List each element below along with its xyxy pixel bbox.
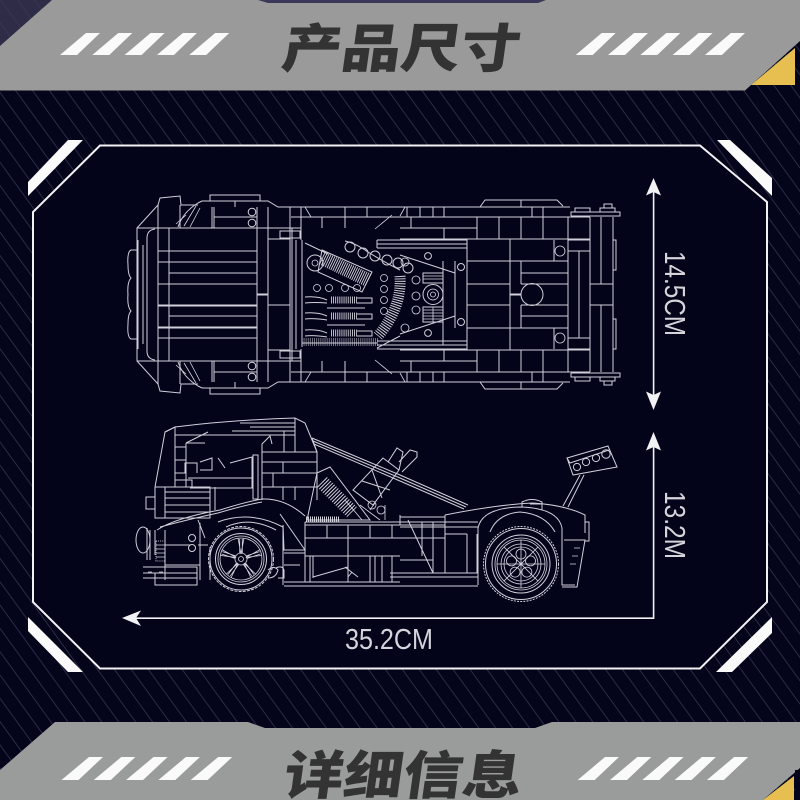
header stripes left	[60, 33, 229, 55]
panel: footer band	[0, 722, 800, 800]
label: 13.2M: 13.2M	[658, 491, 690, 559]
car top view blueprint	[128, 195, 620, 394]
car side view blueprint	[136, 418, 617, 602]
panel: header band	[0, 0, 800, 90]
title: product dimensions: 产品尺寸	[278, 21, 524, 79]
panel: blueprint frame	[33, 146, 767, 668]
footer stripes right	[578, 757, 748, 780]
corner brackets	[28, 140, 772, 672]
top notch accent	[255, 0, 548, 4]
footer stripes left	[62, 757, 232, 780]
label: 14.5CM: 14.5CM	[658, 251, 690, 336]
rear wheel	[484, 526, 558, 602]
label: 35.2CM: 35.2CM	[345, 624, 433, 656]
engine bay detail	[302, 240, 464, 348]
front wheel	[208, 526, 274, 592]
arrow: width 14.5cm	[646, 178, 661, 410]
header stripes right	[576, 33, 745, 55]
arrow: height 13.2cm and length 35.2cm	[122, 432, 661, 626]
